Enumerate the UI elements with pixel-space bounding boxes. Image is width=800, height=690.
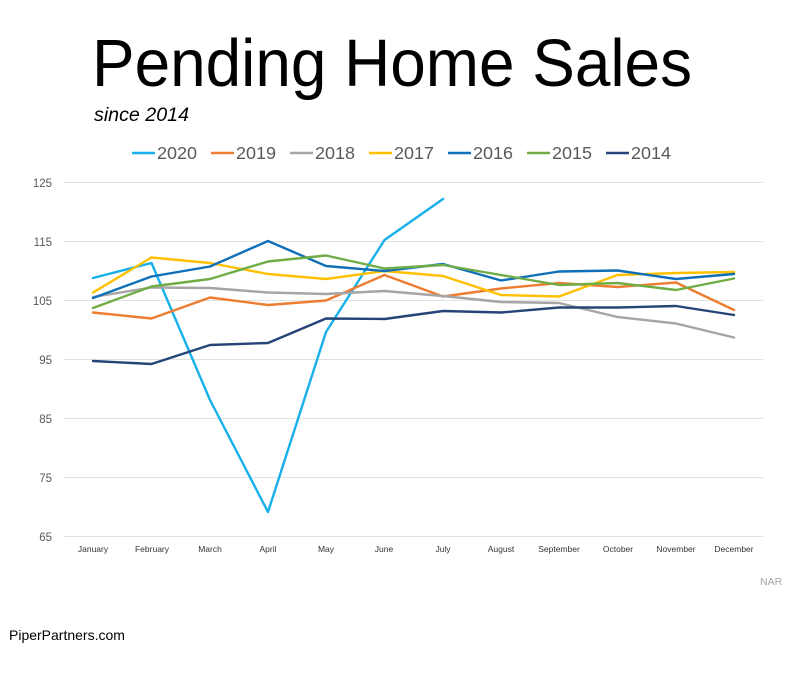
legend: 2020: [157, 143, 197, 163]
x axis labels: January: [78, 544, 109, 554]
x axis labels: November: [656, 544, 696, 554]
legend: 2019: [236, 143, 276, 163]
y axis labels: 75: [39, 473, 52, 485]
legend: 2015: [552, 143, 592, 163]
legend: 2014: [631, 143, 671, 163]
website credit: PiperPartners.com: [9, 627, 125, 643]
title: Pending Home Sales: [92, 26, 692, 101]
y axis labels: 95: [39, 355, 52, 367]
series 2017: [93, 258, 734, 296]
legend: 2017: [394, 143, 434, 163]
series 2019: [93, 275, 734, 318]
x axis labels: September: [538, 544, 580, 554]
series 2020: [93, 199, 443, 512]
legend: 2016: [473, 143, 513, 163]
y axis labels: [33, 178, 52, 544]
x axis labels: March: [198, 544, 222, 554]
series 2015: [93, 256, 734, 308]
x axis labels: [78, 544, 754, 554]
y axis labels: 105: [33, 296, 52, 308]
legend: 2018: [315, 143, 355, 163]
series 2018: [93, 288, 734, 338]
y axis gridlines: [64, 182, 763, 536]
y axis labels: 115: [34, 237, 52, 249]
series 2016: [93, 241, 734, 298]
y axis labels: 125: [33, 178, 52, 190]
x axis labels: July: [435, 544, 451, 554]
x axis labels: December: [714, 544, 754, 554]
x axis labels: June: [375, 544, 393, 554]
series 2014: [93, 306, 734, 364]
x axis labels: February: [135, 544, 170, 554]
x axis labels: August: [488, 544, 515, 554]
x axis labels: October: [603, 544, 633, 554]
legend: [132, 143, 671, 163]
y axis labels: 65: [39, 532, 52, 544]
subtitle: since 2014: [94, 105, 189, 126]
line chart: [93, 199, 734, 512]
x axis labels: May: [318, 544, 335, 554]
y axis labels: 85: [39, 414, 52, 426]
source note: NAR: [760, 576, 783, 588]
x axis labels: April: [259, 544, 277, 554]
